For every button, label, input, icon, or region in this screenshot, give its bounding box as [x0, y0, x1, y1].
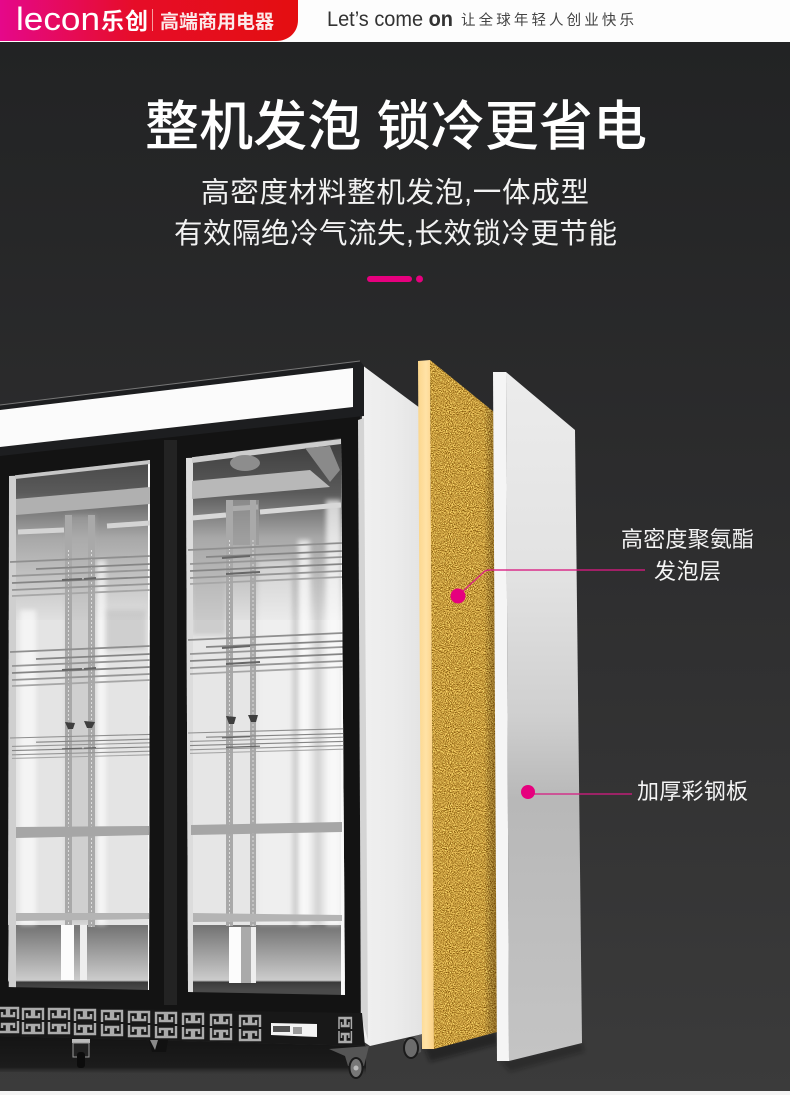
control display [271, 1023, 317, 1037]
foam edge shading [430, 360, 497, 1049]
interior light stripes [258, 500, 341, 925]
accent marker [367, 276, 423, 282]
brand badge [0, 0, 298, 41]
header chinese slogan: 让全球年轻人创业快乐 [461, 11, 634, 29]
bottom white strip [0, 1091, 790, 1095]
hooks [65, 721, 95, 729]
logo chinese name: 乐创 [101, 8, 148, 34]
foam callout label line 1: 高密度聚氨酯 [621, 527, 754, 552]
steel callout leader [532, 793, 632, 795]
uprights [226, 500, 256, 926]
side ornament [339, 1018, 351, 1042]
shelves [10, 556, 150, 596]
grille ornaments [0, 1008, 260, 1040]
lightbox panel [0, 368, 353, 447]
cabinet side panel [361, 365, 423, 1046]
grille band [0, 1007, 365, 1046]
steel callout dot [521, 785, 535, 799]
steel callout label: 加厚彩钢板 [637, 779, 748, 804]
logo wordmark: lecon [16, 1, 100, 37]
subtitle [174, 177, 617, 250]
refrigerator [0, 361, 423, 1078]
uprights [65, 515, 95, 927]
header bar [0, 0, 790, 42]
subtitle line 1: 高密度材料整机发泡,一体成型 [201, 177, 589, 209]
foam callout label line 2: 发泡层 [654, 559, 721, 584]
callout: foam layer [450, 527, 754, 604]
steel face [506, 372, 582, 1061]
lightbox frame highlight [0, 361, 360, 405]
badge divider [152, 9, 153, 31]
cabinet side edge [358, 418, 368, 1040]
right glass door [180, 430, 350, 998]
caster: rear right [404, 1034, 422, 1058]
foam callout dot [450, 588, 466, 604]
subtitle line 2: 有效隔绝冷气流失,长效锁冷更节能 [174, 218, 617, 250]
steel floor shadow [500, 1042, 584, 1072]
pipe base [229, 927, 241, 983]
pipe base [61, 925, 74, 980]
door divider [164, 440, 177, 1005]
plinth [0, 1036, 366, 1075]
callout: steel panel [521, 779, 748, 804]
badge slogan: 高端商用电器 [160, 10, 274, 33]
title: 整机发泡 锁冷更省电 [145, 97, 647, 157]
shelves [188, 543, 343, 584]
foam textured face [430, 360, 497, 1049]
foam floor shadow [424, 1032, 498, 1062]
caster: left [72, 1039, 90, 1068]
foam layer panel [418, 360, 498, 1062]
steel panel [493, 372, 584, 1072]
top lightbox frame [0, 361, 364, 456]
hooks [226, 715, 258, 724]
header english slogan: Let’s come on [327, 8, 453, 31]
left glass door [8, 460, 150, 990]
foam callout leader [462, 570, 645, 592]
door frame body [0, 405, 360, 1016]
caster: middle [149, 1040, 168, 1052]
steel edge strip [493, 372, 509, 1061]
foam edge strip [418, 360, 434, 1049]
caster: front right [329, 1046, 369, 1078]
